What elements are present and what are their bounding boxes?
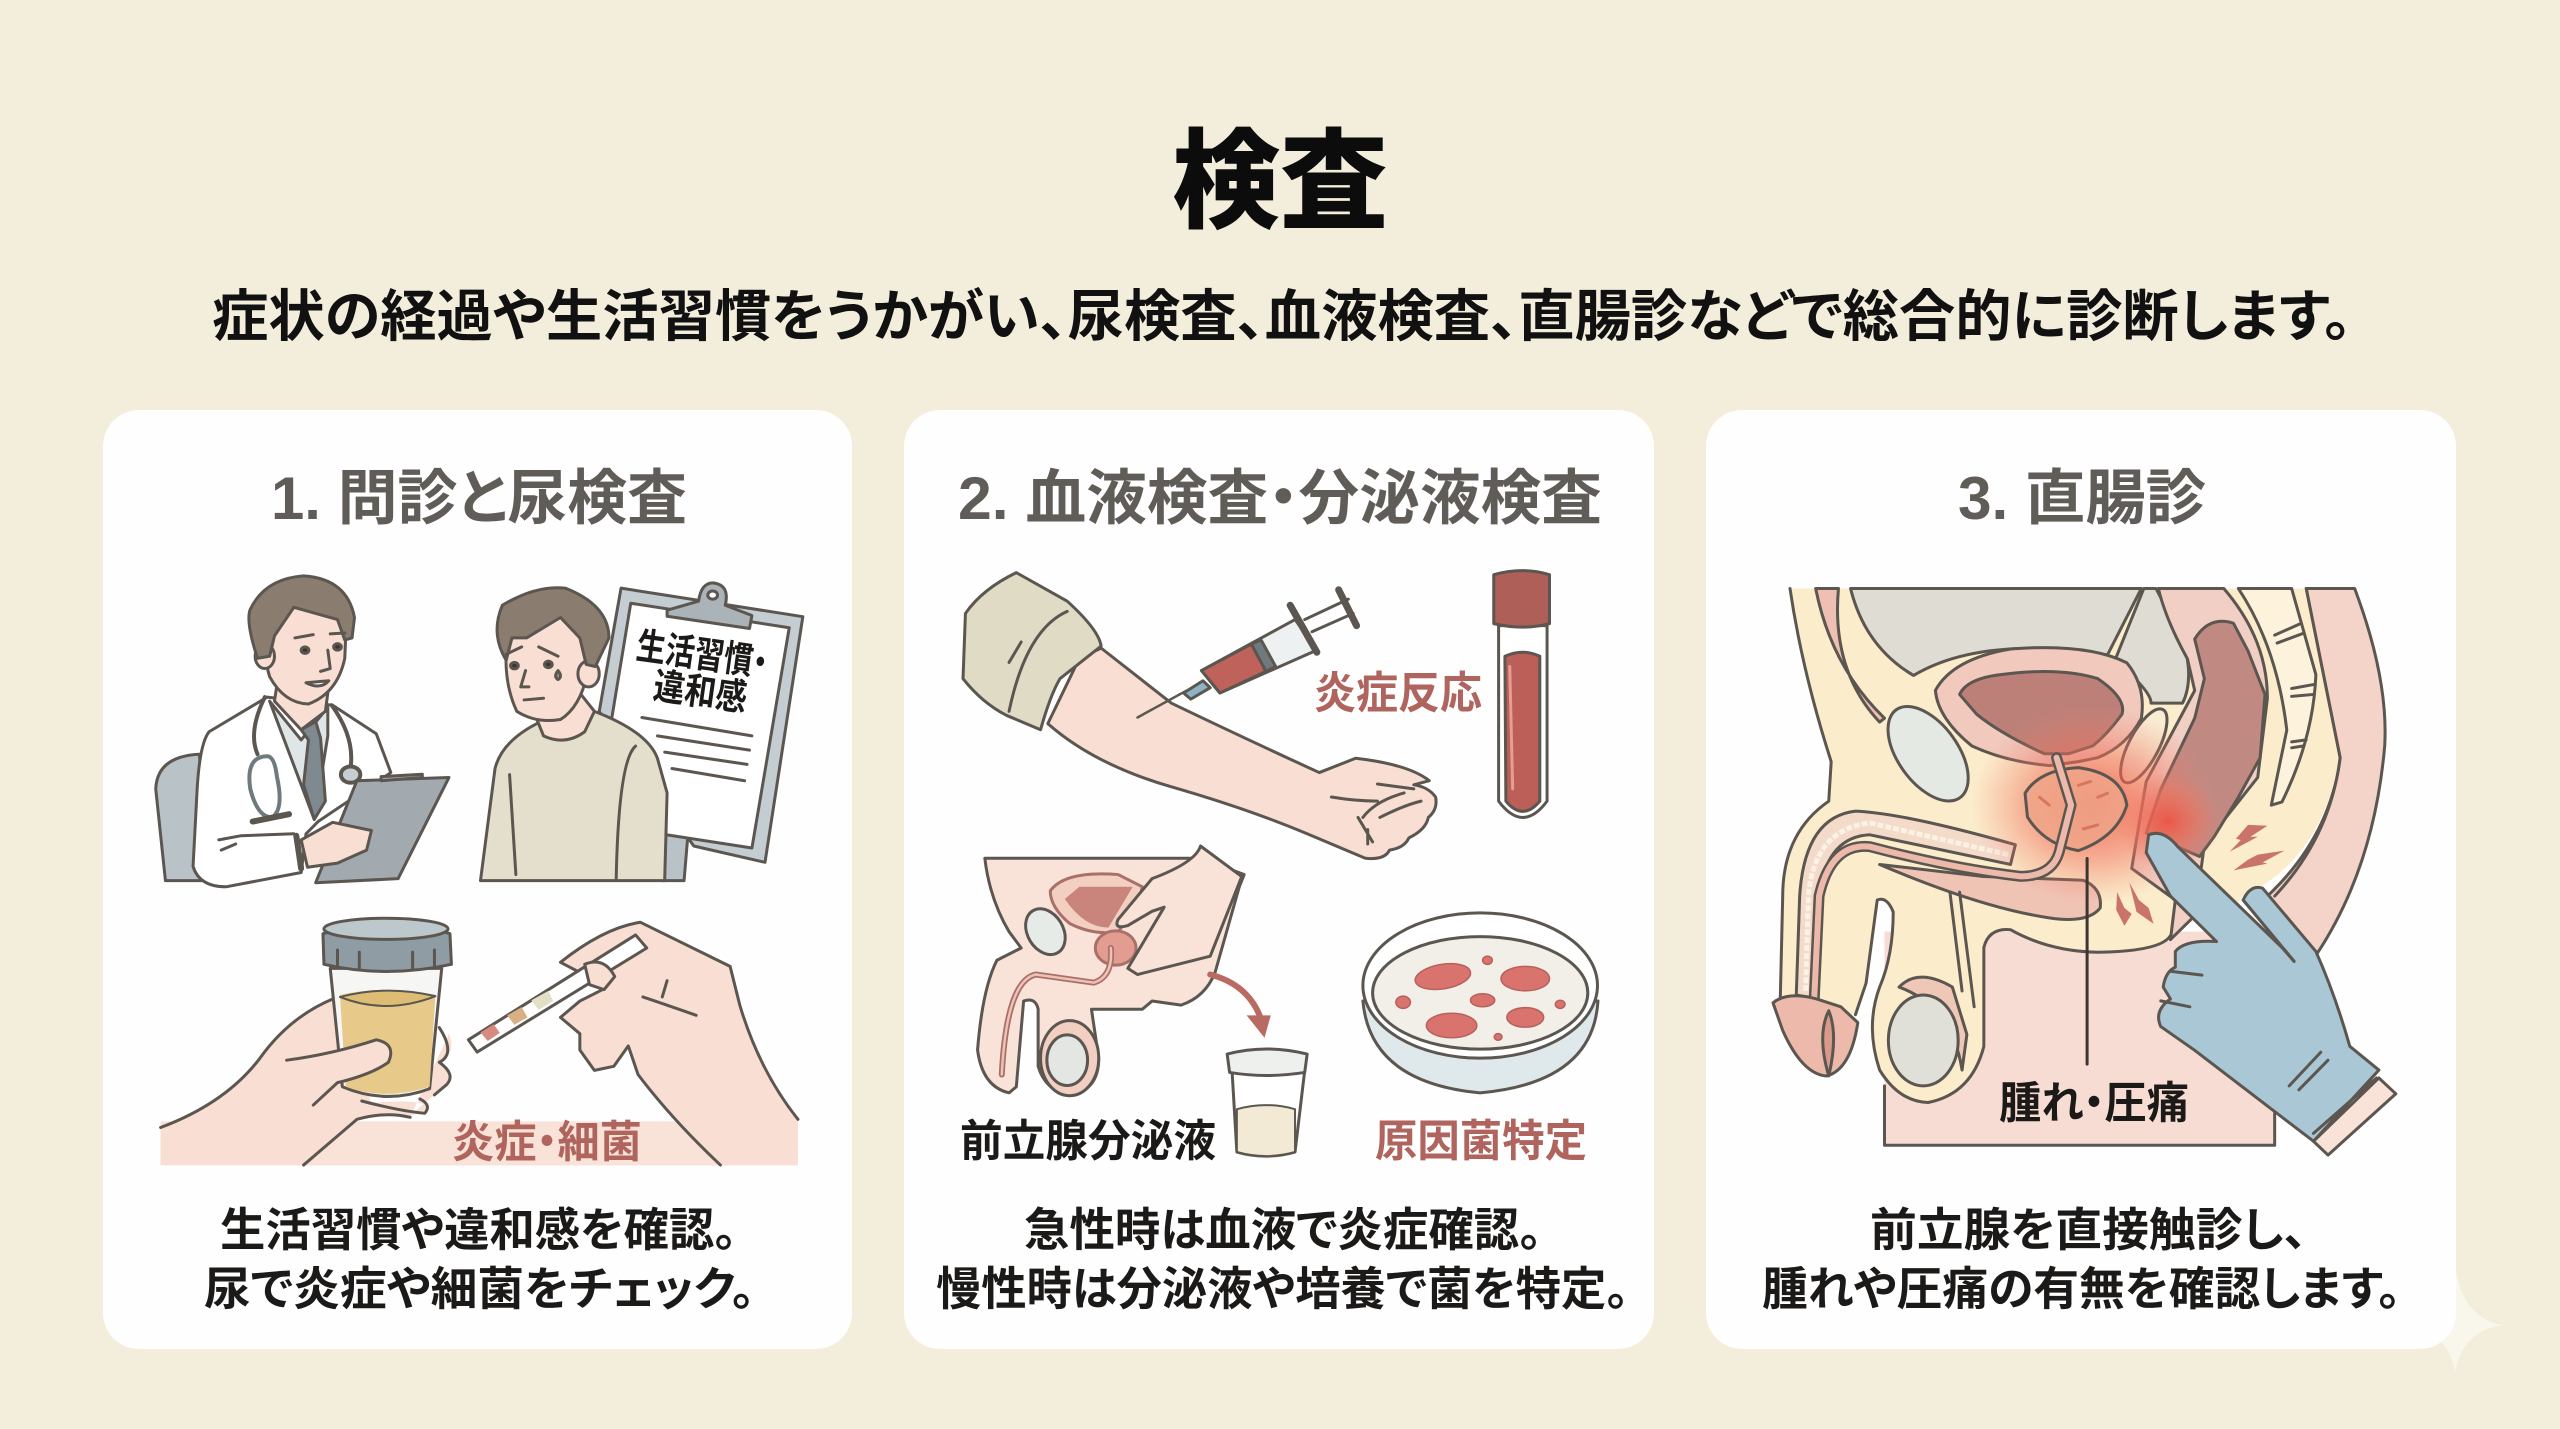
icon: doctor coat [193,697,391,887]
patient's sweater [480,711,667,881]
inflammation glow [1972,706,2221,904]
doctor's clipboard [316,777,449,883]
panel: 2 blood and secretion tests [904,410,1654,1349]
prostate [2025,768,2127,851]
panel: 1 interview and urine test [103,410,852,1349]
pubic bone [1871,696,1985,811]
clipboard text [634,625,770,719]
icon: urine cup [323,918,451,1096]
scrotum and testicle [1888,892,1974,1086]
icon: pelvis cross-section [978,858,1244,1096]
bladder [1935,648,2142,766]
doctor's hand [301,822,371,867]
illustration: doctor, patient, clipboard, urine test [156,576,803,1165]
patient's head [497,588,609,740]
urethra [1814,758,2071,999]
label: prostatic secretion: 前立腺分泌液 [960,1117,1216,1166]
clipboard text: 生活習慣・ [634,625,770,684]
icon: doctor's chair [156,754,209,881]
description 2: 慢性時は分泌液や培養で菌を特定。 [936,1263,1629,1315]
description 1: 生活習慣や違和感を確認。 [220,1204,737,1256]
main tissue [1780,588,2340,1102]
sacrum [2238,588,2316,805]
stethoscope [249,697,360,822]
outer tissue crescent [2267,588,2385,955]
description 2 [936,1204,1629,1315]
description 2: 急性時は血液で炎症確認。 [1024,1204,1542,1256]
icon: left hand back [161,999,451,1165]
rectum [2132,588,2267,940]
icon: right hand [560,922,798,1165]
panel: 3 digital rectal exam [1706,410,2456,1349]
label: swelling and tenderness: 腫れ・圧痛 [1999,1079,2189,1128]
illustration: blood draw, tube, prostate massage, culture dish [963,571,1598,1156]
icon: right thumb [585,962,615,990]
icon: syringe [1138,590,1357,717]
icon: test strip [468,935,647,1052]
icon: left thumb [287,1040,391,1105]
arrow: to sample cup [1210,975,1271,1038]
clipboard text: 違和感 [651,665,750,719]
description 3: 腫れや圧痛の有無を確認します。 [1762,1263,2401,1315]
heading 2: 2. 血液検査・分泌液検査 [958,465,1602,532]
icon: arm [1048,648,1436,859]
icon: patient's chair [662,781,690,881]
icon: blood tube [1494,571,1549,817]
wrist [2313,1078,2396,1155]
pointer line [2086,859,2089,1064]
label: inflammatory reaction: 炎症反応 [1314,669,1482,718]
pain marks [2116,825,2284,926]
heading 1: 1. 問診と尿検査 [271,465,687,532]
illustration: pelvic cross-section with examining finger [1773,588,2396,1155]
title: 検査 [1172,121,1388,242]
description 1 [204,1204,755,1315]
icon: secretion cup [1227,1049,1307,1156]
description 3: 前立腺を直接触診し、 [1870,1204,2307,1256]
sparkle mark [2408,1265,2502,1372]
shirt and tie [270,701,328,819]
glans [1773,996,1858,1076]
heading 3: 3. 直腸診 [1958,465,2206,532]
gloved hand [2146,833,2379,1141]
subtitle: 症状の経過や生活習慣をうかがい、尿検査、血液検査、直腸診などで総合的に診断します。 [212,285,2352,348]
seminal vesicle [2111,704,2176,787]
label: identify causative bacteria: 原因菌特定 [1375,1117,1587,1166]
icon: culture dish [1363,913,1598,1093]
pelvic cavity [1816,588,2189,722]
pink band behind hands [161,1121,798,1165]
label: inflammation and bacteria: 炎症・細菌 [452,1118,642,1167]
lower body [1884,932,2275,1145]
doctor's head [249,576,354,730]
bulb [1880,864,2100,919]
description 1: 尿で炎症や細菌をチェック。 [204,1263,755,1315]
icon: large clipboard [594,583,803,862]
corpus of the penis [1796,811,2015,999]
icon: rolled sleeve [963,573,1101,730]
description 3 [1762,1204,2401,1315]
icon: gloved fingers on prostate [1117,846,1242,975]
